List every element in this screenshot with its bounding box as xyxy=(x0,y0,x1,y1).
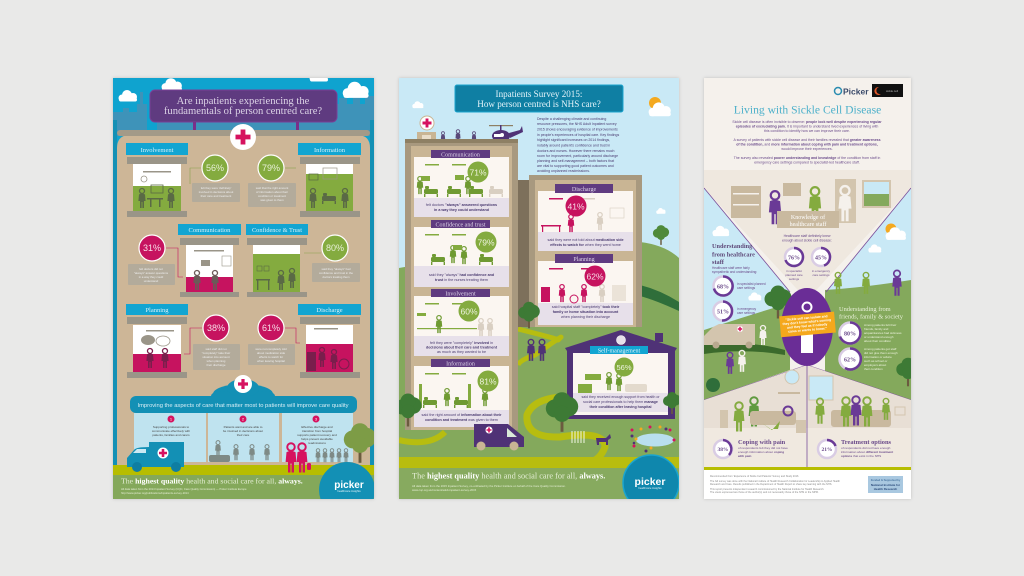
poster 3 white footer: Recommended from 'Experience of Sickle Cell Patients' Survey and Study 2016 xyxy=(710,475,799,478)
knowledge caption xyxy=(782,234,832,242)
stat 80%: said they "always" had xyxy=(322,267,351,271)
stat 76%: settings xyxy=(789,277,800,281)
partner logo: sickle cell xyxy=(886,89,898,93)
poster 2 title box xyxy=(455,85,623,112)
stat 56%: felt they were 'definitely' xyxy=(201,186,232,190)
poster 3 clouds and sun xyxy=(712,224,906,300)
improvement panel 3: Effective discharge and xyxy=(301,425,333,429)
stat 80% friends xyxy=(840,322,902,344)
room: communication xyxy=(414,150,509,217)
poster 3 white footer: This report presents independent research commissioned by the National Institute for Health Research. xyxy=(710,488,825,491)
right building xyxy=(529,175,642,327)
poster 3 lime bar xyxy=(704,467,911,470)
improvement panel 3: 3 xyxy=(315,416,318,422)
stat 68%: in specialist planned xyxy=(737,282,766,286)
poster 1 top cross badge xyxy=(230,124,256,150)
self-management house: social care professionals to help them manage xyxy=(583,400,658,404)
poster 2 title box: Inpatients Survey 2015: xyxy=(496,89,582,99)
treatment options block: options that exist in the NHS xyxy=(841,454,881,458)
stat 79%: condition or treatment xyxy=(258,194,286,198)
stat 38%: "completely" take their xyxy=(202,351,230,355)
poster 3 title: Living with Sickle Cell Disease xyxy=(734,104,881,116)
stat 38%: 38% xyxy=(207,323,225,333)
stat 38%: when planning xyxy=(207,359,226,363)
hospital sign and rooftop xyxy=(417,116,476,139)
room: planning: 62% xyxy=(586,272,604,282)
yellow quote banner: and they feel as if nobody xyxy=(787,322,828,330)
stat 31% xyxy=(128,235,183,285)
right heading: friends family society: friends, family & society xyxy=(839,314,904,320)
NIHR logo box: National Institute for xyxy=(871,483,901,487)
poster 2 intro text: in people's experiences of hospital care. Key findings xyxy=(537,133,619,137)
improvement panel 1: communicate effectively with xyxy=(152,429,190,433)
poster 1 building body xyxy=(113,120,374,465)
stat 61% xyxy=(248,315,300,365)
section: information: Information xyxy=(314,147,346,154)
central purple oval figure xyxy=(781,288,833,366)
poster 2 footer: All data taken from the 2015 Inpatient Survey, co-ordinated by the Picker Institute on behalf of the Care Quality Commission. xyxy=(412,484,566,488)
poster 3 intro text: Sickle cell disease is often invisible to observe: people look well despite experiencing regular xyxy=(732,120,882,124)
panel: poster 2, inpatients survey 2015 xyxy=(394,78,681,511)
stat 76%: 76% xyxy=(788,256,800,262)
room: involvement: felt they were "completely" involved in xyxy=(430,341,493,345)
poster 2 picker logo xyxy=(623,455,679,511)
hilltop figures xyxy=(834,270,902,296)
coping with pain block: Coping with pain xyxy=(738,439,786,446)
stat 45%: care settings xyxy=(812,273,830,277)
stat 45% xyxy=(812,248,831,277)
room: information xyxy=(414,359,509,427)
section: discharge xyxy=(298,304,361,378)
poster 2 title box: How person centred is NHS care? xyxy=(477,99,601,109)
stat 38%: their discharge xyxy=(207,363,226,367)
coping with pain block xyxy=(714,439,788,458)
room: involvement: 60% xyxy=(460,306,478,316)
stat 51%: 51% xyxy=(717,310,729,316)
poster 2 footer: www.cqc.org.uk/content/adult-inpatient-survey-2015 xyxy=(412,488,477,492)
improvement panel 1: Supporting professionals to xyxy=(153,425,190,429)
poster 2 footer xyxy=(399,468,679,499)
poster 1 title box: Are inpatients experiencing the xyxy=(177,96,310,107)
stat 80% xyxy=(304,235,360,282)
poster 2 intro text: are vital to supporting good patient outcomes and xyxy=(537,164,614,168)
improvement panel 1 xyxy=(134,413,206,462)
NIHR logo box: Funded & Supported by xyxy=(871,478,901,482)
room: communication: felt doctors "always" answered questions xyxy=(426,203,497,207)
stat 51% xyxy=(714,302,757,321)
stat 79%: 79% xyxy=(262,163,280,173)
stat 80% friends: 80% xyxy=(844,332,856,338)
panel: poster 3, living with sickle cell disease xyxy=(704,78,920,499)
improvement panel 2: be involved in decisions about xyxy=(223,429,263,433)
stat 56% xyxy=(190,155,240,202)
improvement panel 2 xyxy=(208,413,279,462)
self-management house: said they received enough support from health or xyxy=(581,395,660,399)
stat 61%: about medication side xyxy=(257,351,285,355)
poster 1 ambulance xyxy=(127,442,184,472)
poster 3 knowledge room floor xyxy=(704,170,911,300)
room: involvement xyxy=(414,289,509,356)
poster 2 intro text: notably around patient's confidence and trust in xyxy=(537,144,610,148)
stat 80% friends: or understand enough xyxy=(864,335,894,339)
couple on path xyxy=(527,339,546,361)
left building xyxy=(405,139,529,430)
room: confidence and trust: trust in the nurses treating them xyxy=(435,278,488,282)
stat 80% friends: about their condition xyxy=(864,339,891,343)
poster 3 intro text: episodes of excruciating pain. It is important to understand lived experiences of living with xyxy=(736,124,878,128)
poster 1 footer: http://www.picker.org/publications/inpatients-survey-2014 xyxy=(121,491,189,495)
poster 2 trees xyxy=(394,225,681,432)
left heading: understanding from healthcare staff xyxy=(712,243,757,274)
knowledge banner: healthcare staff xyxy=(790,221,826,228)
room: planning: Planning xyxy=(573,257,595,263)
poster 2 footer: The highest quality health and social care for all, always. xyxy=(412,472,605,480)
room: information: condition and treatment was given to them xyxy=(425,418,498,422)
self-management house xyxy=(565,330,677,419)
treatment options block: of respondents did not have enough xyxy=(841,446,891,450)
gate and dog xyxy=(572,431,611,445)
yellow quote banner: they don't know what's coming xyxy=(782,318,831,326)
room: confidence and trust: Confidence and trust xyxy=(436,222,486,228)
poster 1 title box xyxy=(150,90,337,122)
stat 31%: "always" answer questions xyxy=(134,271,169,275)
right heading: friends family society xyxy=(839,306,904,320)
stat 51%: care settings xyxy=(737,311,755,315)
improvement panel 2: their care xyxy=(237,433,250,437)
stat 76%: planned care xyxy=(785,273,803,277)
left heading: understanding from healthcare staff: from healthcare xyxy=(712,252,755,258)
room: information: 81% xyxy=(479,376,497,386)
poster 2 paths xyxy=(399,329,605,462)
NIHR logo box xyxy=(868,476,903,493)
stat 80% friends: Among patients felt their xyxy=(864,323,896,327)
tan ambulance xyxy=(704,324,767,348)
improvement panel 3: readmissions xyxy=(308,441,326,445)
improvement panel 1: 1 xyxy=(170,416,173,422)
poster 3 white footer: The full survey was done with the National Institute of Health Research Collaboration for Leadership in Applied Health xyxy=(710,480,841,483)
stat 62% friends: Among patients got staff xyxy=(864,347,896,351)
section: involvement: Involvement xyxy=(141,147,174,154)
improvement panel 1: patients, families and carers xyxy=(152,433,190,437)
poster 1 clouds xyxy=(118,78,369,102)
helicopter xyxy=(489,125,523,139)
stat 62% friends: their condition xyxy=(864,367,883,371)
stat 31%: in a way they could xyxy=(139,275,164,279)
improvement cloud banner: Improving the aspects of care that matter most to patients will improve care quality xyxy=(137,403,349,409)
stat 45%: in emergency xyxy=(812,269,831,273)
poster 2 intro text: resource pressures, the NHS Adult Inpatient survey xyxy=(537,122,617,126)
stat 61%: were not completely told xyxy=(255,347,287,351)
stat 79%: of information about their xyxy=(256,190,288,194)
improvement panel 3: transition from hospital xyxy=(302,429,332,433)
coping with pain block: of respondents felt they did not have xyxy=(738,446,788,450)
section: information xyxy=(298,143,361,217)
yellow quote banner xyxy=(779,312,836,337)
poster 3 intro text: emergency care settings compared to specialist-led healthcare staff. xyxy=(754,160,860,164)
section: communication: Communication xyxy=(189,227,231,234)
room: discharge: said they were not told about medication side xyxy=(547,238,624,242)
poster 1 picker logo: picker xyxy=(334,480,364,491)
poster 3 intro text: A survey of patients with sickle cell disease and their families revealed that greater awareness xyxy=(733,138,881,142)
improvement panel 3: helps prevent avoidable xyxy=(301,437,333,441)
poster 1 city skyline xyxy=(113,90,374,136)
poster 2 lime band xyxy=(399,457,679,468)
treatment options block: Treatment options xyxy=(841,439,892,446)
poster 3 intro text: this condition to identify how we can improve their care. xyxy=(764,129,850,133)
stat 38% xyxy=(184,315,240,370)
room: communication: 71% xyxy=(469,168,487,178)
right heading: friends family society: Understanding from xyxy=(839,306,891,313)
poster 3 white footer xyxy=(704,470,911,499)
stat 80%: doctors treating them xyxy=(322,275,350,279)
poster 3 white footer: Research and Care. Results published in the Department of Health Report to share key learning with the NHS. xyxy=(710,483,832,486)
poster 1 lime ground xyxy=(113,465,374,475)
purple ambulance xyxy=(474,424,524,450)
poster 2 intro text: avoiding unplanned readmissions. xyxy=(537,169,590,173)
treatment options block xyxy=(818,439,893,458)
section: planning xyxy=(126,304,188,378)
left heading: understanding from healthcare staff: Healthcare staff were fairly xyxy=(712,266,750,270)
self-management house: their condition after leaving hospital xyxy=(590,405,651,409)
stat 62% friends: 62% xyxy=(844,358,856,364)
poster 3 intro text xyxy=(732,120,882,164)
improvement panel 2: 2 xyxy=(242,416,245,422)
section: discharge: Discharge xyxy=(316,307,343,314)
stat 68% xyxy=(714,276,766,296)
stat 45%: 45% xyxy=(815,256,827,262)
room: communication: in a way they could understand xyxy=(434,208,490,212)
stat 62% friends: information or advice xyxy=(864,355,892,359)
treatment options block: information about different treatment xyxy=(841,450,893,454)
stat 62% friends xyxy=(840,347,898,371)
improvement panel 3: supports patient recovery and xyxy=(297,433,337,437)
poster 3 left sky xyxy=(704,188,790,345)
poster 1 footer xyxy=(113,475,374,499)
left heading: understanding from healthcare staff: Understanding xyxy=(712,243,753,250)
poster 3 intro text: of the condition, and more information about coping with pain and treatment options, xyxy=(736,142,878,146)
poster 2 intro text xyxy=(537,117,619,173)
stat 61%: effects to watch for xyxy=(259,355,283,359)
poster 1 pink family xyxy=(286,443,311,472)
poster 3 intro text: would improve their experiences. xyxy=(781,147,833,151)
treatment options block: 21% xyxy=(822,447,832,453)
room: planning: family or home situation into account xyxy=(553,310,619,314)
poster 1 footer: All data taken from the 2014 Inpatient Survey (CQC, Care Quality Commission) — Picker Institute Europe xyxy=(121,487,247,491)
room: involvement: Involvement xyxy=(445,292,476,298)
knowledge banner xyxy=(777,211,839,228)
stat 79%: said that the right amount xyxy=(256,186,289,190)
stat 68%: care settings xyxy=(737,286,755,290)
poster 3 right sky xyxy=(826,188,911,345)
poster 3 lower floor xyxy=(704,428,911,467)
room: information: Information xyxy=(446,360,475,368)
stat 80% friends: friends, family and xyxy=(864,327,889,331)
poster 3 hills xyxy=(704,280,911,400)
poster 2 intro text: highlight significant increases on 2014 findings, xyxy=(537,138,610,142)
poster 1 picker logo xyxy=(319,462,374,499)
section: involvement xyxy=(126,143,188,217)
poster 3 white footer: The views expressed are those of the author(s) and not necessarily those of the NHS or the NIHR. xyxy=(710,491,819,494)
knowledge room illustration xyxy=(731,179,891,224)
stat 76% xyxy=(785,248,803,281)
self-management house: Self-management xyxy=(598,348,640,354)
stat 79%: was given to them xyxy=(260,198,284,202)
stat 56%: 56% xyxy=(206,163,224,173)
room: discharge: 41% xyxy=(567,202,585,212)
poster 1 tree xyxy=(344,423,376,463)
stat 76%: in specialist xyxy=(786,269,802,273)
stat 62% friends: employers about xyxy=(864,363,886,367)
treatment room illustration xyxy=(809,376,905,427)
poster 2 intro text: Despite a challenging climate and continuing xyxy=(537,117,606,121)
poster 3 background xyxy=(704,78,911,499)
knowledge banner: Knowledge of xyxy=(791,214,825,221)
poster 3 dividing lines xyxy=(704,188,911,400)
coping room illustration xyxy=(720,370,806,433)
poster 2 intro text: planning and self-management – both factors that xyxy=(537,159,614,163)
stat 31%: felt doctors did not xyxy=(139,267,163,271)
stat 31%: 31% xyxy=(143,243,161,253)
coping with pain block: enough information about coping xyxy=(738,450,784,454)
left heading: understanding from healthcare staff: sympathetic and understanding: xyxy=(712,270,757,274)
room: discharge xyxy=(538,184,633,251)
poster edge shadows xyxy=(113,78,911,499)
stat 80%: confidence and trust in the xyxy=(319,271,353,275)
improvement cloud banner xyxy=(130,375,357,413)
yellow quote banner: "Sickle cell can isolate and xyxy=(785,314,828,322)
left heading: understanding from healthcare staff: staff xyxy=(712,259,725,266)
section: planning: Planning xyxy=(145,307,169,314)
room: involvement: decisions about their care and treatment xyxy=(426,346,498,350)
stat 56%: involved in decisions about xyxy=(199,190,233,194)
picker logo top: Picker xyxy=(843,86,869,96)
poster 1 sky xyxy=(113,78,374,148)
poster 3 lower panels xyxy=(704,365,911,467)
stat 61%: 61% xyxy=(262,323,280,333)
stat 62% friends: did not give them enough xyxy=(864,351,898,355)
room: confidence and trust: said they "always" had confidence and xyxy=(429,273,495,277)
self-management house: 56% xyxy=(616,363,632,372)
panel: poster 1, fundamentals of person centred care xyxy=(113,70,376,518)
stat 56%: their care and treatment xyxy=(201,194,232,198)
stat 62% friends: such as school or xyxy=(864,359,887,363)
section: confidence and trust xyxy=(246,224,308,297)
coping with pain block: 38% xyxy=(718,447,728,453)
pond and flowers xyxy=(630,426,676,452)
poster 1 picker logo: healthcare insights xyxy=(337,489,361,493)
poster 1 title box: fundamentals of person centred care? xyxy=(164,106,322,117)
stat 80% friends: acquaintances had sickness xyxy=(864,331,902,335)
NIHR logo box: Health Research xyxy=(874,487,897,491)
knowledge caption: enough about sickle cell disease: xyxy=(782,238,832,242)
poster 1 footer: The highest quality health and social care for all, always. xyxy=(121,476,303,486)
room: discharge: Discharge xyxy=(572,187,596,193)
kneeling figures xyxy=(726,350,746,374)
improvement panel 3 xyxy=(282,413,353,462)
poster 2 clouds and sun xyxy=(412,97,671,214)
room: information: said the right amount of information about their xyxy=(422,413,502,417)
stat 51%: in emergency xyxy=(737,307,757,311)
poster 3 trees xyxy=(706,286,920,392)
poster 2 sky xyxy=(399,78,679,268)
stat 80%: 80% xyxy=(326,243,344,253)
yellow quote banner: cares or wants to know." xyxy=(788,326,827,334)
stat 68%: 68% xyxy=(717,284,729,290)
poster 2 intro text: room for improvement, particularly around discharge xyxy=(537,154,618,158)
room: planning: when planning their discharge xyxy=(561,315,610,319)
stat 38%: said staff did not xyxy=(206,347,227,351)
poster 2 picker logo: healthcare insights xyxy=(638,486,662,490)
stat 61%: when leaving hospital xyxy=(257,359,285,363)
room: discharge: effects to watch for when they went home xyxy=(550,243,621,247)
section: confidence and trust: Confidence & Trust xyxy=(252,227,302,234)
stat 38%: situation into account xyxy=(202,355,230,359)
stat 31%: understand xyxy=(144,279,159,283)
knowledge caption: Healthcare staff definitely knew xyxy=(784,234,831,238)
poster 3 intro text: The survey also revealed poorer understanding and knowledge of the condition from staff in xyxy=(734,156,880,160)
section: communication xyxy=(178,224,241,297)
poster 2 intro text: 2015 shows encouraging evidence of improvements xyxy=(537,128,618,132)
coping with pain block: with pain xyxy=(737,454,752,458)
partner logo xyxy=(872,84,903,97)
improvement panel 2: Patients want and are able to xyxy=(224,425,263,429)
room: involvement: as much as they wanted to be xyxy=(437,350,486,354)
poster 2 intro text: doctors and nurses. However there remains much xyxy=(537,149,614,153)
room: planning: said hospital staff "completely" took their xyxy=(552,305,620,309)
poster 2 hills xyxy=(399,242,679,457)
room: planning xyxy=(538,254,633,325)
room: confidence and trust xyxy=(414,220,509,287)
room: communication: Communication xyxy=(441,152,480,158)
stat 79% xyxy=(248,155,296,207)
poster 2 picker logo: picker xyxy=(635,476,665,488)
room: confidence and trust: 79% xyxy=(477,238,495,248)
